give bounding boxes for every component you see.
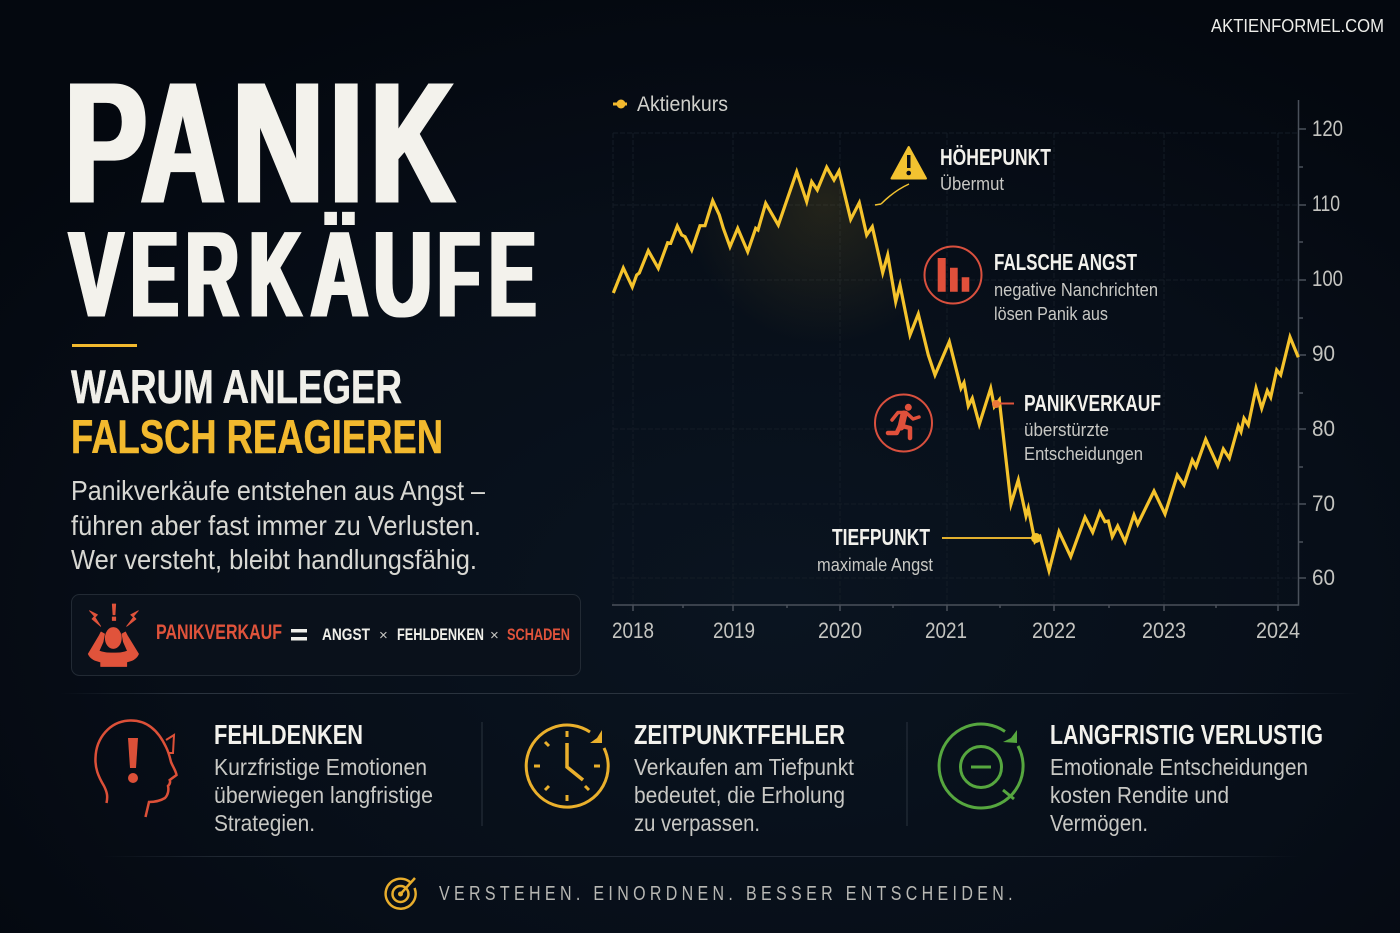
subtitle: WARUM ANLEGER xyxy=(71,360,402,413)
y axis labels: 100 xyxy=(1312,266,1343,291)
formula text: FEHLDENKEN xyxy=(397,625,484,644)
formula text: PANIKVERKAUF xyxy=(156,621,282,644)
formula text: × xyxy=(379,627,388,644)
title: V xyxy=(69,207,123,344)
annotation: Panikverkauf: PANIKVERKAUF xyxy=(1024,390,1161,416)
icon: circular minus xyxy=(939,724,1023,808)
x axis labels: 2022 xyxy=(1032,618,1076,643)
price glow xyxy=(613,167,935,500)
panel: Fehldenken: Strategien. xyxy=(214,810,315,836)
intro text: Panikverkäufe entstehen aus Angst – xyxy=(71,475,485,506)
icon: clock xyxy=(526,725,608,807)
title: N xyxy=(232,46,324,240)
annotation: falsche Angst: negative Nanchrichten xyxy=(994,279,1158,300)
price line xyxy=(613,167,1298,571)
x axis labels: 2020 xyxy=(818,618,862,643)
title: A xyxy=(141,46,225,240)
title: E xyxy=(131,207,178,344)
formula text xyxy=(156,621,570,644)
icon: runner xyxy=(875,394,932,452)
icon: panicking person xyxy=(88,604,138,666)
title: Ä xyxy=(311,207,368,344)
panel: Zeitpunktfehler: Verkaufen am Tiefpunkt xyxy=(634,754,855,780)
footer tagline xyxy=(386,878,1013,909)
panel: Fehldenken xyxy=(95,719,433,836)
panel: Zeitpunktfehler: zu verpassen. xyxy=(634,810,760,836)
subtitle: FALSCH REAGIEREN xyxy=(71,410,443,463)
title: E xyxy=(489,207,536,344)
annotation: Tiefpunkt: maximale Angst xyxy=(817,554,933,575)
annotation: falsche Angst xyxy=(924,246,1158,324)
panel: Langfristig verlustig xyxy=(939,719,1323,836)
title: P xyxy=(65,46,147,240)
annotation: Panikverkauf: Entscheidungen xyxy=(1024,443,1143,464)
x axis labels: 2021 xyxy=(925,618,967,643)
panel: Zeitpunktfehler xyxy=(526,719,855,836)
formula text: ANGST xyxy=(322,625,370,644)
y axis labels: 60 xyxy=(1312,565,1335,590)
y axis labels xyxy=(1312,116,1343,590)
panel: Fehldenken: überwiegen langfristige xyxy=(214,782,433,808)
annotation: Höhepunkt: Übermut xyxy=(940,173,1004,194)
panel: Langfristig verlustig: LANGFRISTIG VERLUSTIG xyxy=(1050,719,1323,750)
footer tagline: VERSTEHEN. EINORDNEN. BESSER ENTSCHEIDEN. xyxy=(439,882,1013,904)
intro text: Wer versteht, bleibt handlungsfähig. xyxy=(71,544,477,575)
icon: bars xyxy=(924,246,982,304)
panel: Langfristig verlustig: Vermögen. xyxy=(1050,810,1148,836)
x axis labels: 2018 xyxy=(612,618,654,643)
legend: Aktienkurs xyxy=(637,93,728,116)
y axis labels: 120 xyxy=(1312,116,1343,141)
line chart xyxy=(612,93,1343,643)
panel: Fehldenken: FEHLDENKEN xyxy=(214,719,363,750)
y axis labels: 70 xyxy=(1312,491,1335,516)
panel: Zeitpunktfehler: ZEITPUNKTFEHLER xyxy=(634,719,845,750)
panel: Fehldenken: Kurzfristige Emotionen xyxy=(214,754,427,780)
panel: Zeitpunktfehler: bedeutet, die Erholung xyxy=(634,782,845,808)
title: F xyxy=(438,207,480,344)
x axis labels: 2023 xyxy=(1142,618,1186,643)
annotation: Höhepunkt xyxy=(875,144,1051,205)
axes xyxy=(612,100,1306,611)
annotation: Tiefpunkt: TIEFPUNKT xyxy=(832,524,930,550)
panel: Langfristig verlustig: kosten Rendite und xyxy=(1050,782,1229,808)
y axis labels: 80 xyxy=(1312,416,1335,441)
subtitle xyxy=(71,360,443,463)
annotation: Panikverkauf: überstürzte xyxy=(1024,419,1109,440)
panel: formula xyxy=(72,594,580,676)
title: U xyxy=(374,207,432,344)
title: R xyxy=(186,207,239,344)
y axis labels: 90 xyxy=(1312,341,1335,366)
x axis labels: 2024 xyxy=(1256,618,1300,643)
annotation: falsche Angst: FALSCHE ANGST xyxy=(994,249,1137,275)
y axis labels: 110 xyxy=(1312,191,1340,216)
formula text: SCHADEN xyxy=(507,625,570,644)
formula text: × xyxy=(490,627,499,644)
title: K xyxy=(249,207,302,344)
intro text: führen aber fast immer zu Verlusten. xyxy=(71,510,481,541)
title xyxy=(65,46,536,344)
accent rule xyxy=(72,344,137,347)
annotation: Tiefpunkt xyxy=(817,524,1041,575)
brand label: AKTIENFORMEL.COM xyxy=(1211,16,1384,36)
x axis labels: 2019 xyxy=(713,618,755,643)
annotation: Panikverkauf xyxy=(875,390,1161,464)
title: I xyxy=(330,46,362,240)
annotation: falsche Angst: lösen Panik aus xyxy=(994,303,1108,324)
icon: warning triangle xyxy=(892,147,926,178)
icon: head with exclamation mark xyxy=(95,720,176,817)
title: K xyxy=(371,46,455,240)
x axis labels xyxy=(612,618,1300,643)
annotation: Höhepunkt: HÖHEPUNKT xyxy=(940,144,1051,170)
panel: Langfristig verlustig: Emotionale Entscheidungen xyxy=(1050,754,1308,780)
intro text xyxy=(71,475,485,575)
icon: target xyxy=(386,878,416,909)
